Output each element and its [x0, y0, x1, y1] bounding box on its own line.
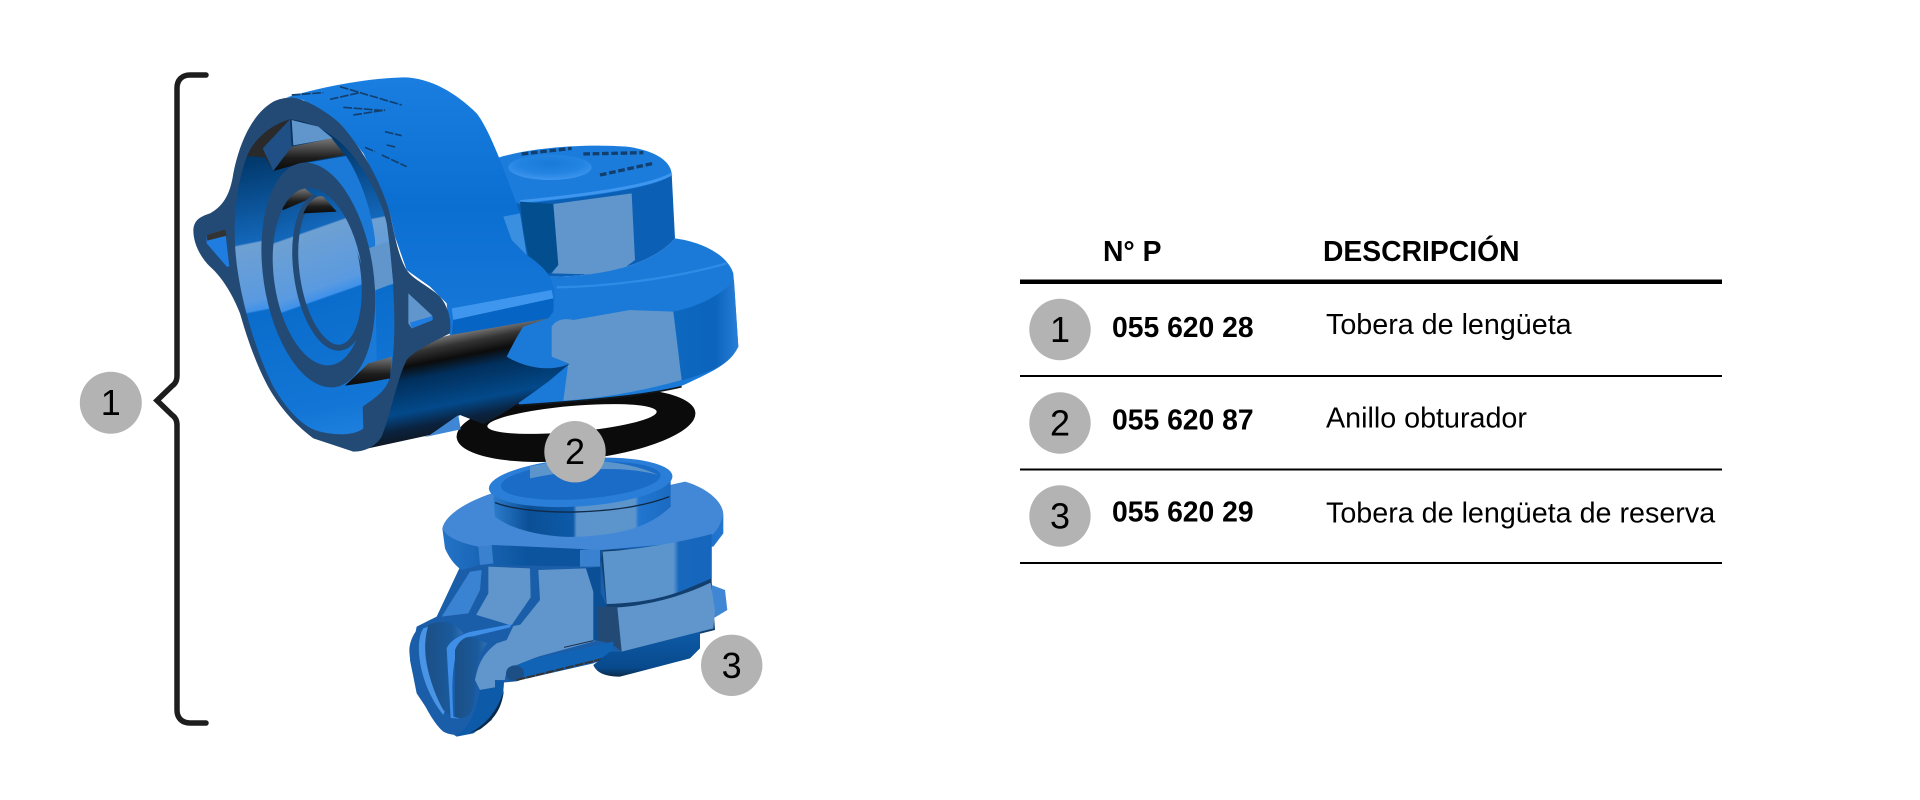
cap top band: [287, 77, 555, 337]
band lip shade: [452, 298, 553, 335]
lower block tab: [712, 585, 727, 618]
parts table: [1020, 235, 1722, 564]
flange top: [442, 482, 723, 550]
outer lip inner: [426, 622, 463, 717]
row 1: 055 620 28: [1112, 311, 1254, 343]
badge: callout 2: 2: [565, 431, 585, 472]
row 1: 1: [1050, 309, 1070, 350]
inner tube dark top: [303, 196, 337, 213]
light patch under cap: [423, 415, 461, 437]
row 3: [1029, 485, 1715, 547]
row 2: 2: [1050, 402, 1070, 444]
inner lip stripe: [447, 624, 512, 719]
row 3: 055 620 29: [1112, 496, 1254, 528]
table header rule: [1020, 280, 1722, 284]
neck opening back wall: [530, 460, 658, 478]
skirt base: [480, 238, 738, 405]
row 3: 3: [1050, 496, 1070, 536]
foot light panel: [475, 617, 563, 690]
neck: [493, 480, 671, 537]
row 2: [1029, 392, 1527, 454]
foot inner recess: [455, 637, 487, 718]
flange tab right: [580, 548, 600, 567]
skirt shaded side: [673, 280, 738, 381]
nut top dimple: [508, 155, 592, 180]
left wing opening: [207, 229, 229, 267]
block backing: [600, 533, 715, 653]
right wing opening: [408, 293, 433, 328]
recess facet light: [292, 120, 333, 145]
flange side wall: [442, 515, 723, 570]
badge: callout 3: [701, 635, 762, 696]
inner opening dark top: [282, 188, 313, 210]
nut top surface: [487, 146, 672, 204]
nozzle body base: [410, 557, 622, 737]
cap central opening: [235, 119, 394, 434]
skirt bottom shadow line: [517, 387, 682, 405]
body panel left: [442, 570, 482, 617]
row 1: Tobera de lengüeta: [1326, 309, 1572, 341]
icon: O-ring seal: [453, 378, 699, 472]
skirt hex facet light: [552, 310, 682, 401]
upper block: [603, 534, 712, 604]
divider lower: [597, 607, 622, 652]
row 2: 055 620 87: [1112, 404, 1254, 436]
badge: callout 1: [80, 372, 142, 434]
cap underside: [353, 318, 570, 452]
washer ring: [247, 155, 389, 395]
badge: callout 2: [544, 421, 606, 482]
left wing opening shadow: [207, 229, 227, 241]
slot blue band: [513, 642, 613, 680]
recess shadow left: [247, 119, 290, 171]
sliver between band and nut: [503, 213, 527, 255]
washer opening: [262, 182, 375, 371]
washer extruded blue edge: [303, 156, 377, 385]
extruded light stripe: [368, 242, 393, 292]
lower block: [617, 583, 715, 652]
cap front face: [193, 98, 450, 452]
table heading: part number: N° P: [1103, 235, 1162, 267]
outer lip stripe: [419, 627, 445, 715]
bracket: assembly 1: [157, 75, 206, 723]
badge: callout 3: 3: [722, 645, 742, 686]
row 2: Anillo obturador: [1326, 402, 1527, 434]
lower sleeve: [593, 632, 700, 677]
nut engraved marks: [522, 148, 653, 175]
row 1: [1029, 299, 1572, 360]
row 3: Tobera de lengüeta de reserva: [1326, 497, 1715, 529]
table heading: description: DESCRIPCIÓN: [1323, 235, 1520, 267]
nut hex facet light: [552, 193, 635, 275]
skirt top highlight: [557, 263, 727, 287]
rim groove: [495, 497, 669, 512]
badge: callout 1: 1: [101, 382, 121, 423]
slot end cap: [506, 665, 524, 681]
foot lower wall: [457, 680, 504, 735]
nut hex facet dark: [520, 202, 558, 274]
neck opening: [500, 457, 662, 505]
divider upper: [586, 567, 607, 641]
nut top front highlight: [520, 174, 672, 202]
rear nut: [480, 146, 738, 405]
icon: spare tongue nozzle insert: [409, 452, 727, 737]
slot upper mark: [564, 641, 593, 647]
nut upper body: [483, 173, 675, 283]
slot lower edge: [517, 657, 612, 680]
foot silhouette: [409, 614, 513, 735]
nozzle foot: [409, 614, 563, 735]
engraved marks on cap band: [292, 87, 407, 167]
body panel right: [507, 568, 597, 663]
foot bottom shadow: [468, 690, 504, 734]
recess hex facet navy: [263, 119, 292, 171]
right wing opening blue stripe: [410, 316, 433, 328]
washer shadow: [345, 357, 392, 386]
neck rim: [487, 452, 674, 513]
inner tube ring: [292, 194, 364, 351]
flange tab left: [478, 545, 493, 565]
body panel middle: [467, 567, 531, 632]
recess dark band: [273, 138, 345, 171]
icon: blue tongue nozzle cap: [193, 77, 738, 452]
band lip highlight: [452, 290, 553, 320]
